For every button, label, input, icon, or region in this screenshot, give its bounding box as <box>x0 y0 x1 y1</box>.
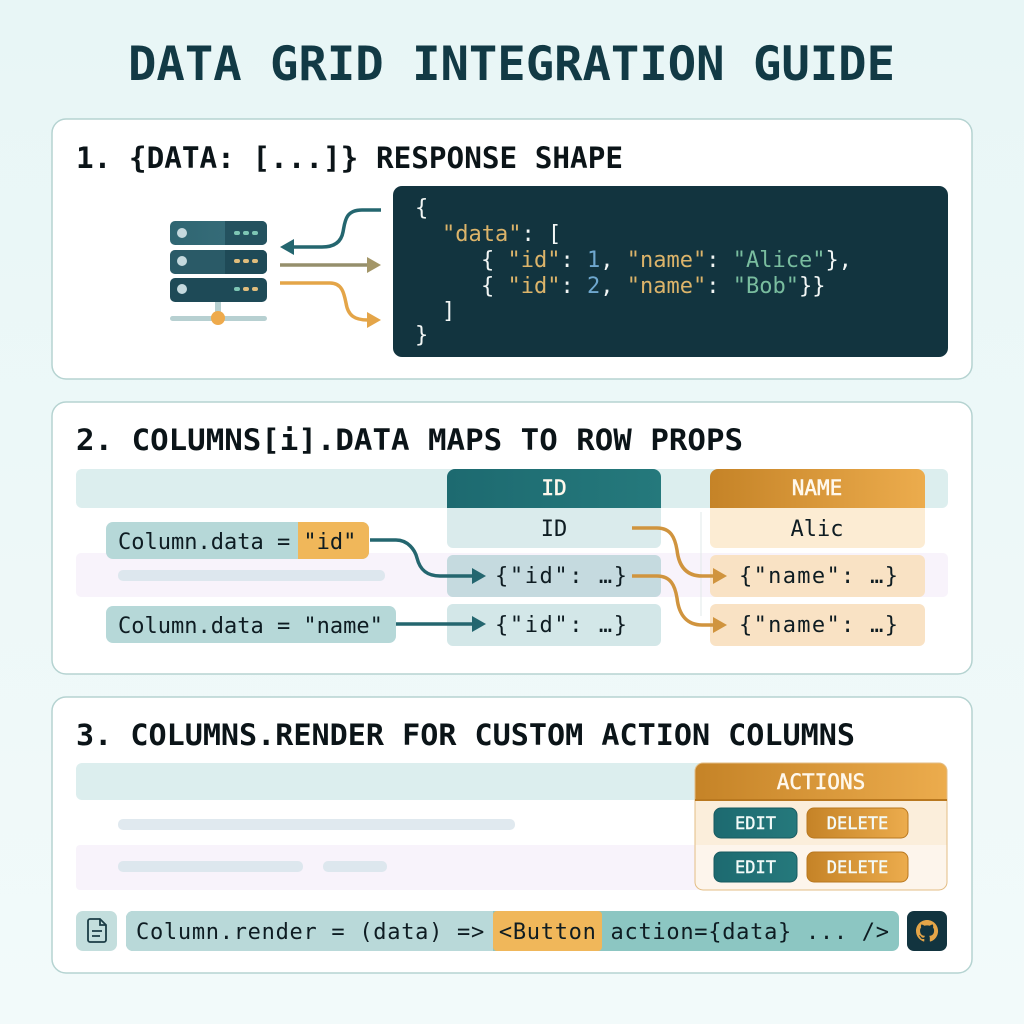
column: NAME <box>710 469 925 646</box>
button: edit row 1 <box>714 808 797 838</box>
label: Column.data name <box>106 606 396 643</box>
button: delete row 1 <box>807 808 908 838</box>
button: edit row 2: EDIT <box>735 858 776 878</box>
heading: column mapping: 2. COLUMNS[i].DATA MAPS TO ROW PROPS <box>76 423 743 457</box>
arrow: id to row <box>370 540 486 584</box>
icon: GitHub <box>907 911 947 951</box>
code block: JSON response: { "id": 1, "name": "Alice"}, <box>481 248 852 273</box>
button: delete row 1: DELETE <box>827 814 888 834</box>
label: Column.data id: Column.data = "id" <box>118 530 356 555</box>
column: actions <box>695 763 947 890</box>
column: ID <box>447 469 661 646</box>
column: ID: ID <box>541 517 567 542</box>
arrow: data response <box>280 283 381 328</box>
placeholder bar <box>118 570 385 581</box>
code block: JSON response: "data": [ <box>442 222 561 247</box>
panel: response shape <box>52 119 972 379</box>
heading: response shape: 1. {DATA: [...]} RESPONSE SHAPE <box>76 141 623 175</box>
code bar: Column.render: Column.render = (data) => <Button action={data} ... /> <box>136 920 889 945</box>
highlighted row band <box>76 553 948 597</box>
icon: server stack <box>170 221 267 325</box>
placeholder bars row 2 <box>118 861 387 872</box>
column: actions: ACTIONS <box>777 770 865 794</box>
code block: JSON response: { <box>415 196 428 221</box>
code block: JSON response: { "id": 2, "name": "Bob"}} <box>481 274 825 299</box>
arrow: id row to name row <box>632 576 727 633</box>
table header band <box>76 763 700 800</box>
table header band <box>76 469 948 508</box>
heading: custom action columns: 3. COLUMNS.RENDER FOR CUSTOM ACTION COLUMNS <box>76 718 855 752</box>
button: edit row 1: EDIT <box>735 814 776 834</box>
label: Column.data name: Column.data = "name" <box>118 614 383 639</box>
column: NAME: {"name": …} <box>739 613 898 638</box>
panel: column mapping <box>52 402 972 674</box>
code block: JSON response: ] <box>442 299 455 324</box>
title: DATA GRID INTEGRATION GUIDE <box>128 37 895 92</box>
arrow: name to row <box>396 616 486 632</box>
column: NAME: Alic <box>791 517 843 542</box>
icon: document <box>76 911 117 951</box>
column divider <box>700 512 702 616</box>
label: Column.data id <box>106 522 369 559</box>
column: NAME: NAME <box>792 476 842 500</box>
button: edit row 2 <box>714 852 797 882</box>
highlighted row band <box>76 845 701 890</box>
code block: JSON response: } <box>415 323 428 348</box>
button: delete row 2 <box>807 852 908 882</box>
arrow: middle response <box>280 257 381 273</box>
column: ID: ID <box>541 476 567 500</box>
arrow: request to server <box>280 210 381 255</box>
placeholder bar row 1 <box>118 819 515 830</box>
column: ID: {"id": …} <box>495 564 627 589</box>
column: ID: {"id": …} <box>495 613 627 638</box>
code bar: Column.render <box>126 911 899 951</box>
arrow: id cell to name row <box>632 528 727 584</box>
panel: custom action columns <box>52 697 972 973</box>
code block: JSON response <box>393 186 948 357</box>
column: NAME: {"name": …} <box>739 564 898 589</box>
button: delete row 2: DELETE <box>827 858 888 878</box>
